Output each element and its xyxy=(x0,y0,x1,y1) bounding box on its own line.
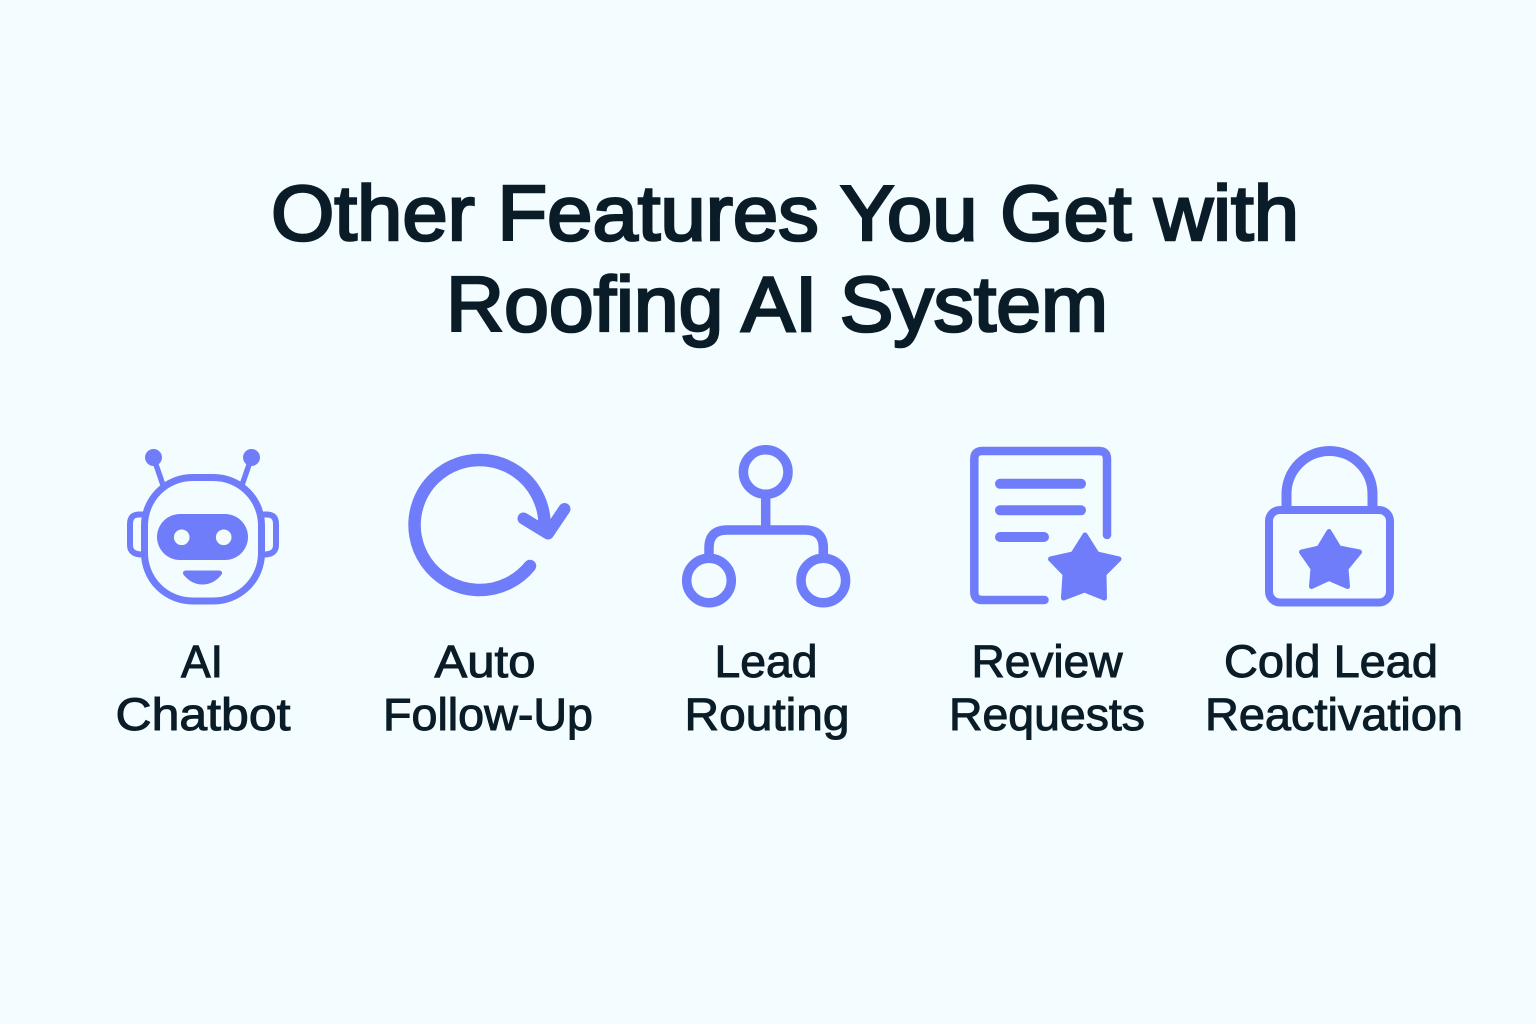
title xyxy=(271,169,1299,348)
label: AI Chatbot: Chatbot xyxy=(116,689,291,740)
feature: Cold Lead Reactivation xyxy=(1205,451,1463,740)
label: Lead Routing xyxy=(684,636,850,740)
label: Auto Follow-Up: Follow-Up xyxy=(383,689,593,740)
feature: Lead Routing xyxy=(684,450,850,740)
icon: circular arrow xyxy=(415,460,564,590)
icon: robot xyxy=(130,449,276,601)
title: Roofing AI System xyxy=(446,260,1108,348)
label: Review Requests xyxy=(949,636,1145,740)
icon: padlock with star xyxy=(1269,451,1390,602)
label: Auto Follow-Up: Auto xyxy=(434,636,536,687)
label: Cold Lead Reactivation: Cold Lead xyxy=(1224,636,1438,687)
label: AI Chatbot xyxy=(116,636,291,740)
label: Review Requests: Requests xyxy=(949,689,1145,740)
icon: document with star xyxy=(974,451,1119,600)
label: Cold Lead Reactivation: Reactivation xyxy=(1205,689,1463,740)
title: Other Features You Get with xyxy=(271,169,1299,257)
label: AI Chatbot: AI xyxy=(181,636,223,687)
feature: Review Requests xyxy=(949,451,1145,740)
feature: Auto Follow-Up xyxy=(383,460,593,740)
icon: branching network xyxy=(687,450,846,603)
label: Review Requests: Review xyxy=(972,636,1123,687)
label: Cold Lead Reactivation xyxy=(1205,636,1463,740)
label: Lead Routing: Lead xyxy=(714,636,818,687)
label: Auto Follow-Up xyxy=(383,636,593,740)
feature: AI Chatbot xyxy=(116,449,291,740)
label: Lead Routing: Routing xyxy=(684,689,850,740)
